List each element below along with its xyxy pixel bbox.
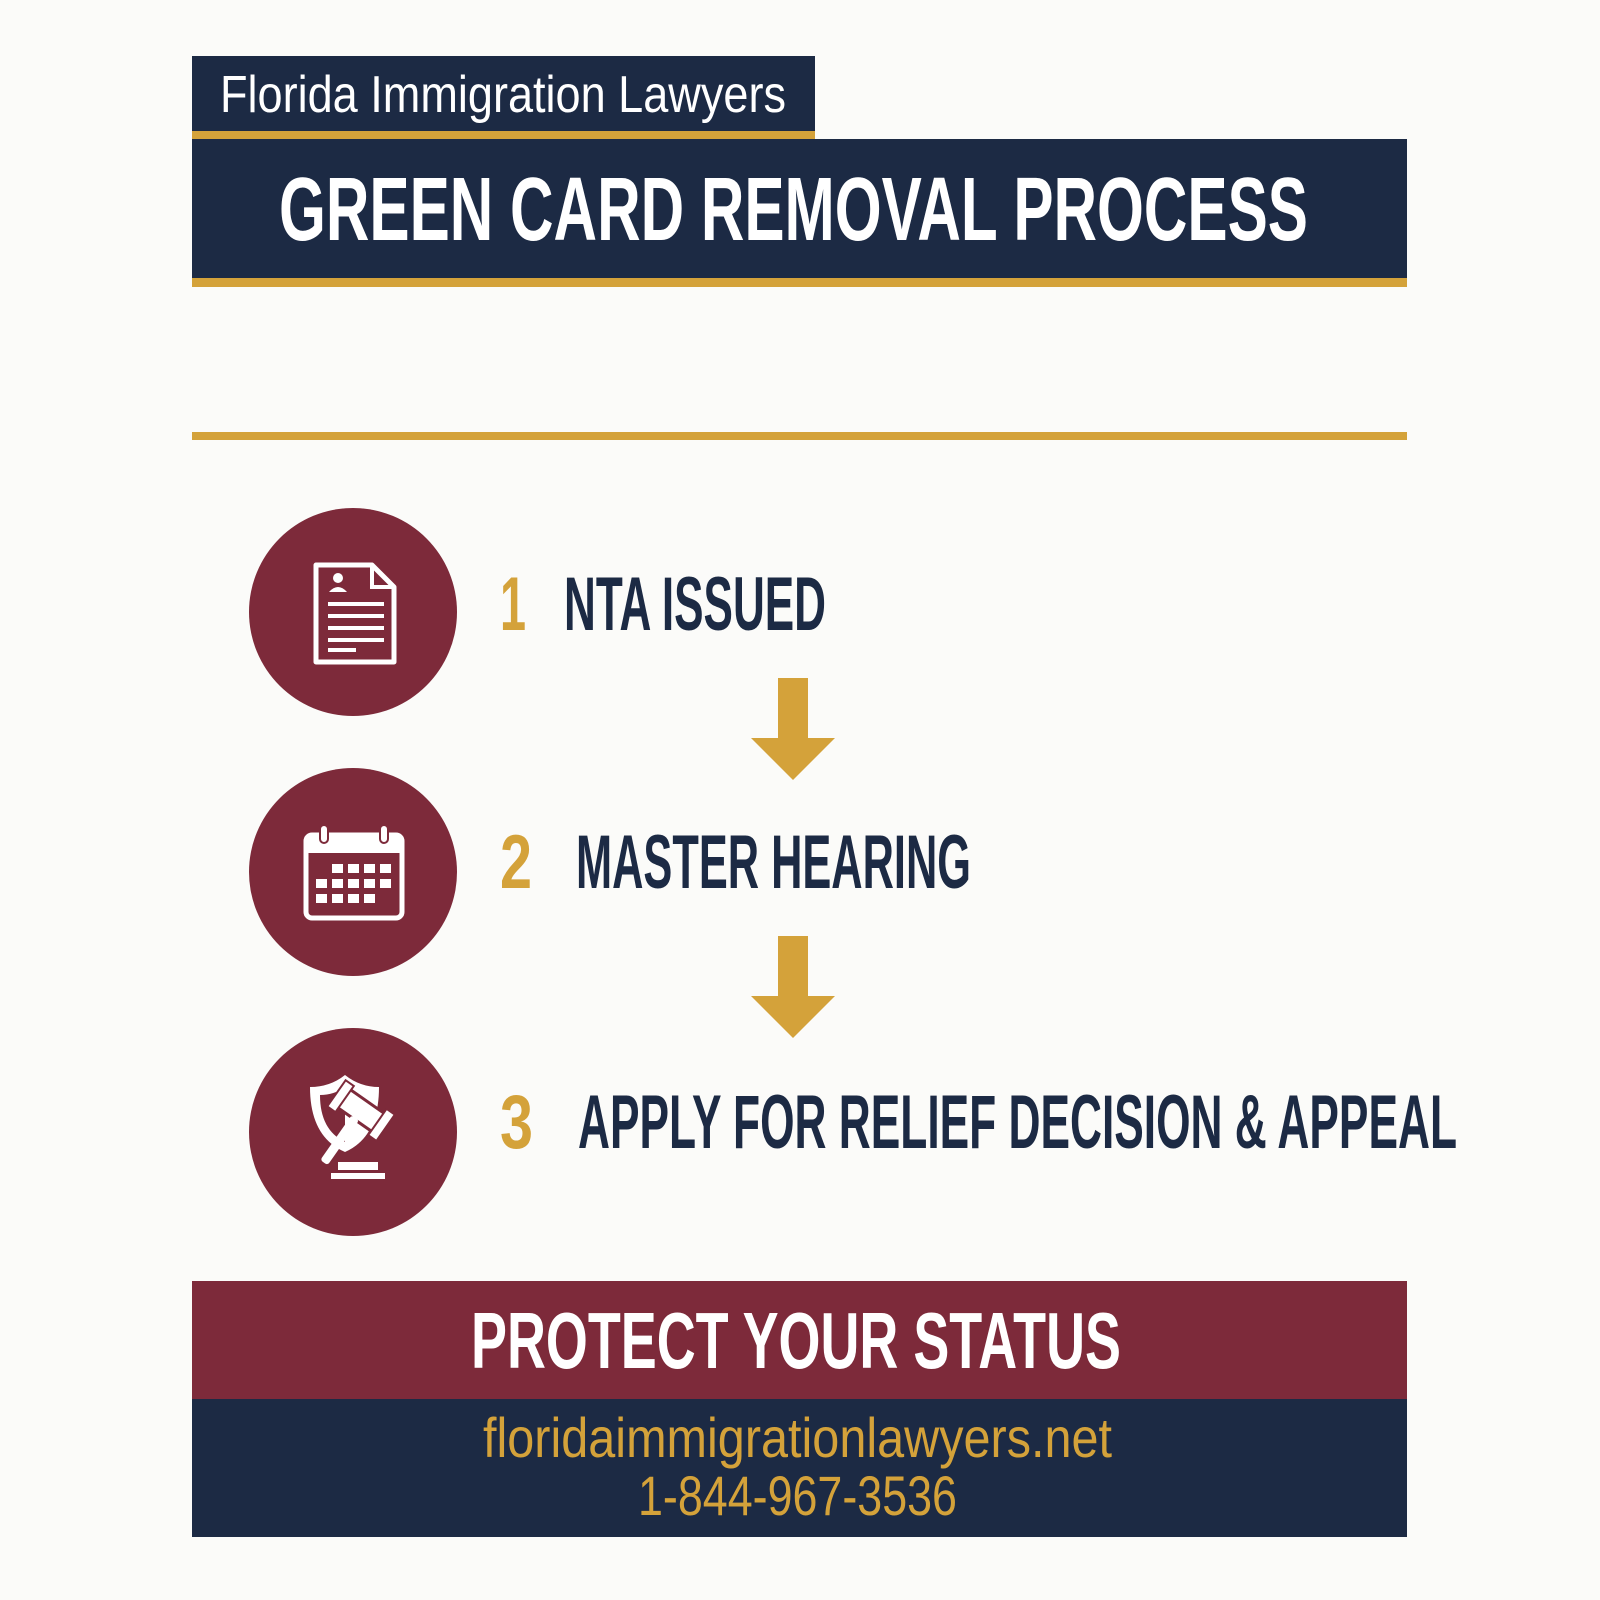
icon: document [249, 508, 457, 716]
footer: contact [192, 1399, 1407, 1537]
step 2 [249, 768, 971, 976]
header: firm name tab: Florida Immigration Lawyers [220, 66, 786, 124]
step 1: NTA ISSUED [564, 562, 826, 647]
footer: contact: floridaimmigrationlawyers.net [483, 1406, 1112, 1469]
step 1 [249, 508, 826, 716]
step 2: MASTER HEARING [576, 820, 971, 905]
footer: contact: 1-844-967-3536 [638, 1464, 957, 1527]
arrow 2 [751, 936, 835, 1038]
arrow 1 [751, 678, 835, 780]
icon: calendar [249, 768, 457, 976]
step 2: 2 [500, 820, 532, 905]
step 1: 1 [500, 562, 526, 647]
title banner [192, 139, 1407, 287]
icon: shield and gavel [249, 1028, 457, 1236]
footer: call to action: PROTECT YOUR STATUS [471, 1296, 1121, 1385]
step 3: 3 [500, 1080, 533, 1165]
step 3 [249, 1028, 1457, 1236]
footer: call to action [192, 1281, 1407, 1400]
header: firm name tab [192, 56, 815, 139]
